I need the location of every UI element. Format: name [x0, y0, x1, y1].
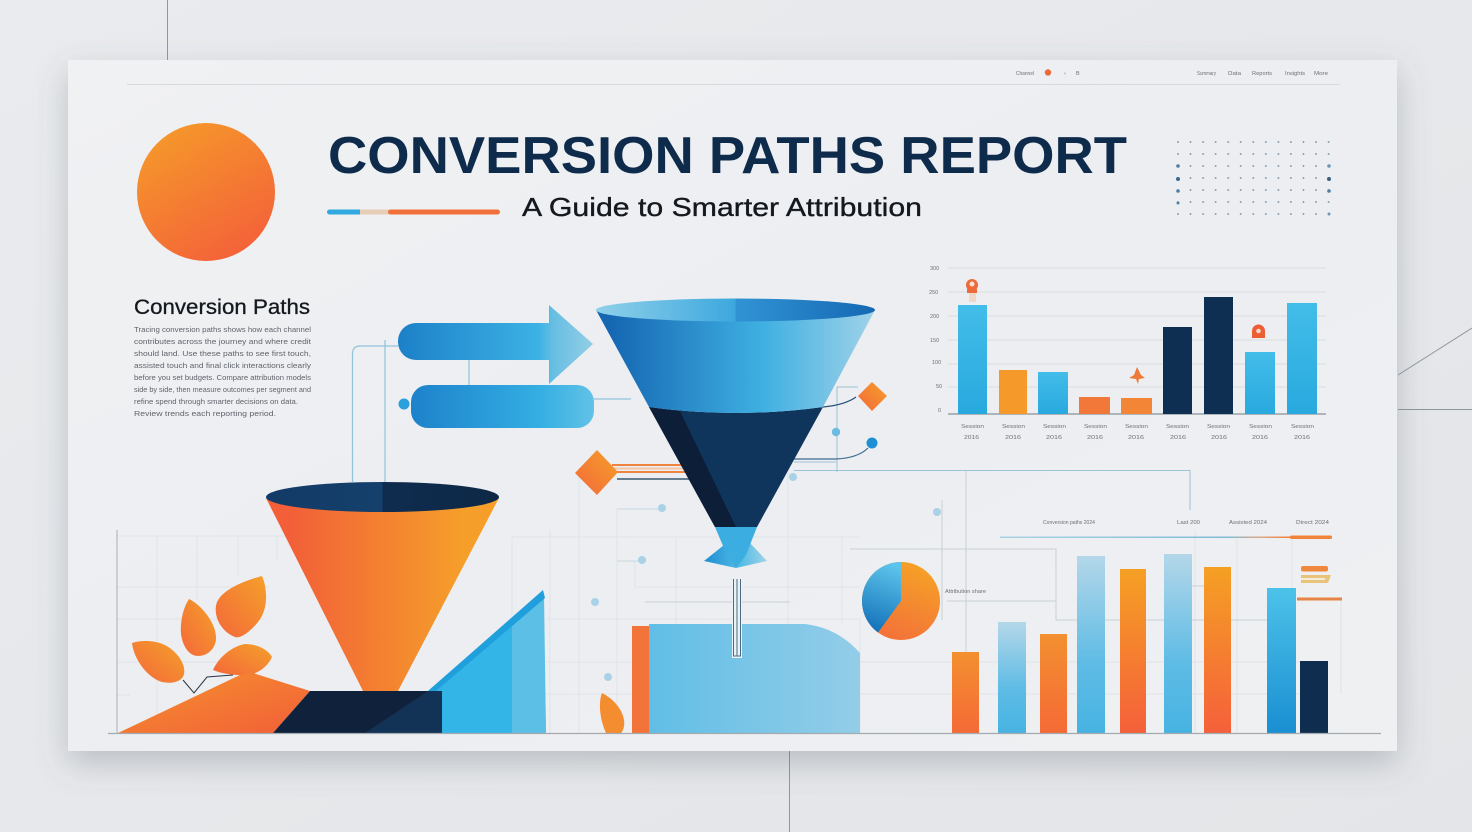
- bottom grid lines: [117, 470, 1341, 733]
- icon: location pin: [966, 279, 978, 302]
- left diamond with lines: [575, 450, 690, 495]
- header strip: Reports: [1252, 71, 1272, 77]
- blue funnel: [596, 298, 875, 568]
- header strip: Summary: [1197, 71, 1216, 77]
- connector lines: [352, 340, 1190, 681]
- top bar chart: Session: [1207, 424, 1230, 430]
- top bar chart: 50: [936, 384, 942, 390]
- subtitle: A Guide to Smarter Attribution: [522, 192, 922, 222]
- body paragraph: Tracing conversion paths shows how each channel: [134, 325, 311, 334]
- top bar chart: Session: [1166, 424, 1189, 430]
- light blue block: [600, 579, 860, 733]
- dot matrix decoration: [1172, 136, 1335, 220]
- baseline: [108, 732, 1381, 734]
- top bar chart: 100: [932, 360, 941, 366]
- top bar chart: 2016: [1170, 435, 1186, 441]
- top bar chart: Session: [1249, 424, 1272, 430]
- lower chart labels: Conversion paths 2024: [1043, 520, 1095, 526]
- top bar chart: 2016: [1211, 435, 1227, 441]
- lower chart labels: Assisted 2024: [1229, 520, 1267, 526]
- lower chart labels: [1043, 520, 1329, 526]
- lower chart labels: Direct 2024: [1296, 520, 1329, 526]
- lower chart rule: [1000, 536, 1332, 539]
- header strip: Data: [1228, 71, 1242, 77]
- body paragraph: refine spend through smarter decisions on data.: [134, 397, 298, 406]
- top bar chart: Session: [1002, 424, 1025, 430]
- right side nodes: [794, 382, 887, 462]
- top bar chart: Session: [1125, 424, 1148, 430]
- top bar chart: 200: [930, 314, 939, 320]
- header strip: B: [1076, 71, 1080, 77]
- blue triangle: [428, 590, 546, 733]
- orange funnel: [266, 482, 499, 691]
- body paragraph: Review trends each reporting period.: [134, 409, 276, 418]
- top bar chart: 2016: [964, 435, 979, 441]
- small legend icon: [1297, 566, 1342, 600]
- pie label: Attribution share: [945, 589, 986, 595]
- body paragraph: assisted touch and final click interactions clearly: [134, 361, 311, 370]
- header strip: ‹: [1064, 71, 1066, 77]
- report card panel: [68, 60, 1397, 751]
- top bar chart: Session: [1291, 424, 1314, 430]
- header strip: Channel: [1016, 71, 1034, 77]
- side heading: Conversion Paths: [134, 296, 310, 319]
- top bar chart: 2016: [1252, 435, 1268, 441]
- top bar chart: [929, 266, 1326, 441]
- top bar chart: 300: [930, 266, 939, 272]
- body paragraph: contributes across the journey and where credit: [134, 337, 312, 346]
- orange hill: [118, 673, 310, 733]
- pie chart: [862, 562, 940, 640]
- body paragraph: side by side, then measure outcomes per segment and: [134, 385, 311, 394]
- title: CONVERSION PATHS REPORT: [328, 127, 1127, 185]
- lower bar chart: [952, 554, 1328, 733]
- top bar chart: 2016: [1087, 435, 1103, 441]
- title underline: [327, 210, 500, 214]
- body paragraph: before you set budgets. Compare attribution models: [134, 373, 311, 382]
- top bar chart: 2016: [1294, 435, 1310, 441]
- pill bar: [398, 385, 594, 428]
- header strip: More: [1314, 71, 1328, 77]
- icon: badge: [1252, 325, 1265, 338]
- body paragraph: [134, 325, 312, 418]
- top bar chart: 0: [938, 408, 941, 414]
- top bar chart: 2016: [1046, 435, 1062, 441]
- top bar chart: 250: [929, 290, 938, 296]
- top bar chart: Session: [1084, 424, 1107, 430]
- leaf plant: [132, 576, 272, 693]
- icon: rocket: [1129, 367, 1145, 384]
- top bar chart: 2016: [1005, 435, 1021, 441]
- header strip: [127, 69, 1340, 84]
- top bar chart: 2016: [1128, 435, 1144, 441]
- body paragraph: should land. Use these paths to see first touch,: [134, 349, 311, 358]
- arrow: [398, 305, 593, 384]
- top bar chart: Session: [1043, 424, 1066, 430]
- dark funnel base: [273, 691, 442, 733]
- top bar chart: Session: [961, 424, 984, 430]
- orange circle: [137, 123, 275, 261]
- top bar chart: 150: [930, 338, 939, 344]
- lower chart labels: Last 200: [1177, 520, 1200, 526]
- header strip: Insights: [1285, 71, 1305, 77]
